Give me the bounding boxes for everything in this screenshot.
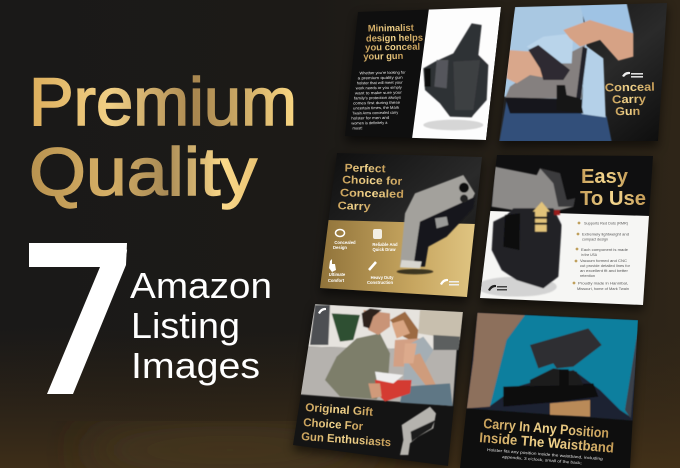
bullet list: Proudly made in Hannibal, <box>578 280 628 286</box>
heading: To Use <box>580 188 646 210</box>
heading: Carry <box>612 94 647 106</box>
features with icons: Concealed <box>334 240 356 245</box>
subtitle: Amazon Listing Images: Images <box>131 345 260 386</box>
features with icons: Reliable And <box>372 242 398 247</box>
panel: conceal carry gun <box>499 3 667 141</box>
icon: black holster <box>423 23 488 130</box>
features with icons <box>328 229 398 285</box>
logo <box>488 285 507 291</box>
bullet list: Supports Red Dots (RMR) <box>584 220 629 226</box>
logo <box>440 279 459 286</box>
heading: Concealed <box>340 187 404 201</box>
heading: design helps <box>366 33 423 45</box>
card shadows <box>293 7 667 468</box>
bullet list: Missouri, home of Mark Twain <box>577 286 629 291</box>
features with icons: Comfort <box>328 278 345 283</box>
bullet list: Each component is made <box>581 247 628 252</box>
title: Premium Quality <box>29 64 297 210</box>
body text <box>487 447 603 465</box>
panel: carry in any position <box>455 310 645 468</box>
body text <box>350 71 407 131</box>
body text: holster that will meet your <box>357 81 404 85</box>
icon: silver pistol <box>400 407 436 455</box>
bullet list: cut provide detailed lines for <box>580 263 631 268</box>
heading <box>580 166 646 210</box>
body text: work needs or you simply <box>356 86 402 90</box>
panel: original gift <box>290 300 470 468</box>
heading: Gun <box>615 106 640 118</box>
bullet list: compact design <box>582 236 608 242</box>
logo <box>622 72 643 78</box>
body text: comes first during these <box>353 101 400 105</box>
bullet list: retention <box>580 273 595 278</box>
heading: Carry In Any Position <box>483 415 610 441</box>
bullet list: an excellent fit and better <box>580 268 629 273</box>
heading: Gun Enthusiasts <box>301 431 391 449</box>
logo <box>318 308 326 314</box>
bullet list <box>573 220 631 291</box>
photo: waistband carry <box>467 313 638 421</box>
icon: silver pistol <box>397 175 475 274</box>
heading: Choice for <box>342 174 403 188</box>
features with icons: Ultimate <box>329 272 346 277</box>
numeral 7: 7 <box>24 207 141 434</box>
heading: Original Gift <box>305 402 374 419</box>
bullet list: Extremely lightweight and <box>582 232 629 236</box>
panel: perfect choice <box>315 150 485 300</box>
heading <box>605 82 654 116</box>
subtitle: Amazon Listing Images <box>130 265 272 386</box>
title: Premium Quality: Premium <box>29 64 297 140</box>
icon: pistol in holster with arrow <box>477 167 575 297</box>
body text: women is definitely a <box>351 121 388 126</box>
subtitle: Amazon Listing Images: Listing <box>131 305 240 346</box>
bullet list: Vacuum formed and CNC <box>580 258 627 263</box>
heading: you conceal <box>365 42 420 54</box>
features with icons: Quick Draw <box>372 247 396 252</box>
bullet list: in the USA <box>581 252 597 257</box>
heading: Easy <box>581 166 629 188</box>
body text: want to make sure your <box>355 91 403 95</box>
panel: easy to use <box>477 150 658 310</box>
body text: must! <box>352 126 363 130</box>
title: Premium Quality: Quality <box>29 134 257 210</box>
heading <box>480 418 614 453</box>
features with icons: Design <box>333 245 347 250</box>
photo: man with holstered gun <box>499 3 633 142</box>
subtitle: Amazon Listing Images: Amazon <box>130 265 272 306</box>
body text: holster for men and <box>351 116 389 121</box>
heading: Inside The Waistband <box>479 429 615 456</box>
heading <box>363 23 423 63</box>
body text: Whether you're looking for <box>359 71 406 75</box>
body text: Twain Arms concealed carry <box>352 111 398 115</box>
features with icons: Heavy Duty <box>371 275 394 280</box>
heading: Perfect <box>344 162 386 175</box>
panel: minimalist design <box>351 7 501 140</box>
body text: Holster fits any position inside the waistband, including <box>487 447 603 461</box>
heading: Carry <box>337 200 372 213</box>
heading: Minimalist <box>368 23 415 35</box>
body text: appendix, 3 o'clock, small of the back; <box>502 454 582 465</box>
body text: a premium quality gun <box>358 76 403 80</box>
heading <box>337 162 405 214</box>
heading <box>301 402 391 449</box>
heading: Conceal <box>605 82 655 94</box>
features with icons: Construction <box>367 280 393 285</box>
photo: soldier and woman with gift <box>300 304 463 406</box>
body text: family's protection always <box>354 96 401 100</box>
body text: uncertain times, the Mark <box>353 106 399 110</box>
heading: Choice For <box>303 417 364 433</box>
heading: your gun <box>363 51 404 63</box>
